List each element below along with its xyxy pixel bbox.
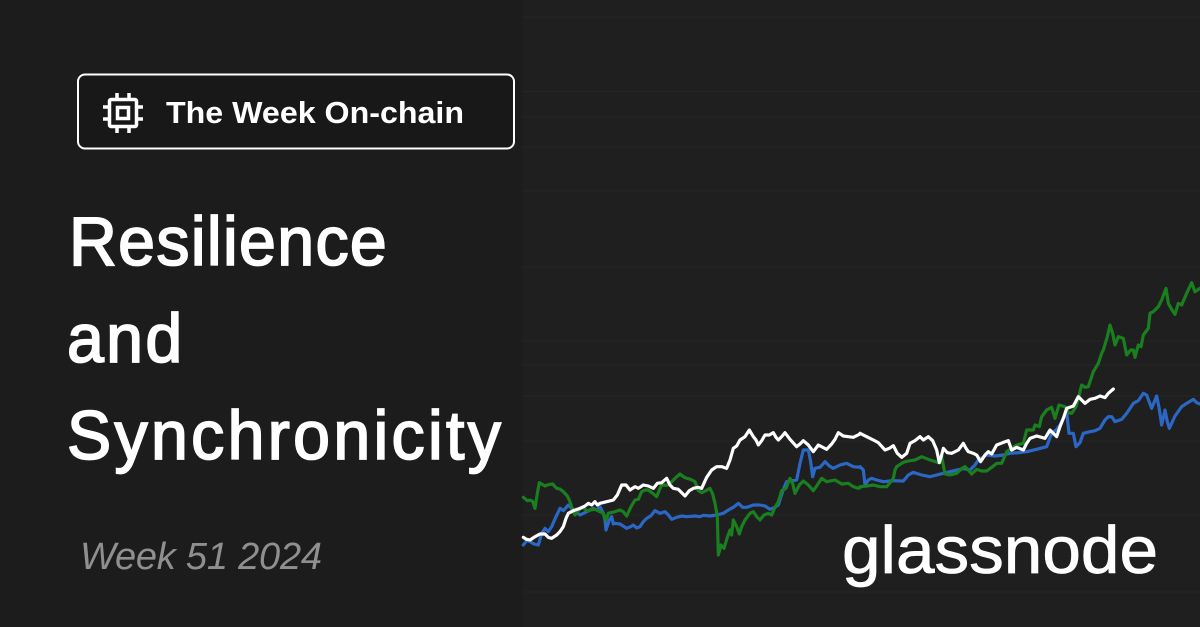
badge: The Week On-chain [78,74,514,148]
badge label: The Week On-chain [166,95,464,130]
title: Resilience [69,204,387,280]
series: green line [523,283,1200,555]
subtitle: week label: Week 51 2024 [80,536,322,578]
title: Synchronicity [67,398,501,474]
line chart: three price series [523,283,1200,555]
panel: chart background [523,0,1200,627]
series: blue line [523,393,1200,545]
panel: left background [0,0,523,627]
icon: microchip [103,93,143,133]
title [67,204,501,474]
logo: glassnode wordmark: glassnode [842,513,1158,588]
title: and [67,301,182,377]
series: white line [523,389,1113,540]
